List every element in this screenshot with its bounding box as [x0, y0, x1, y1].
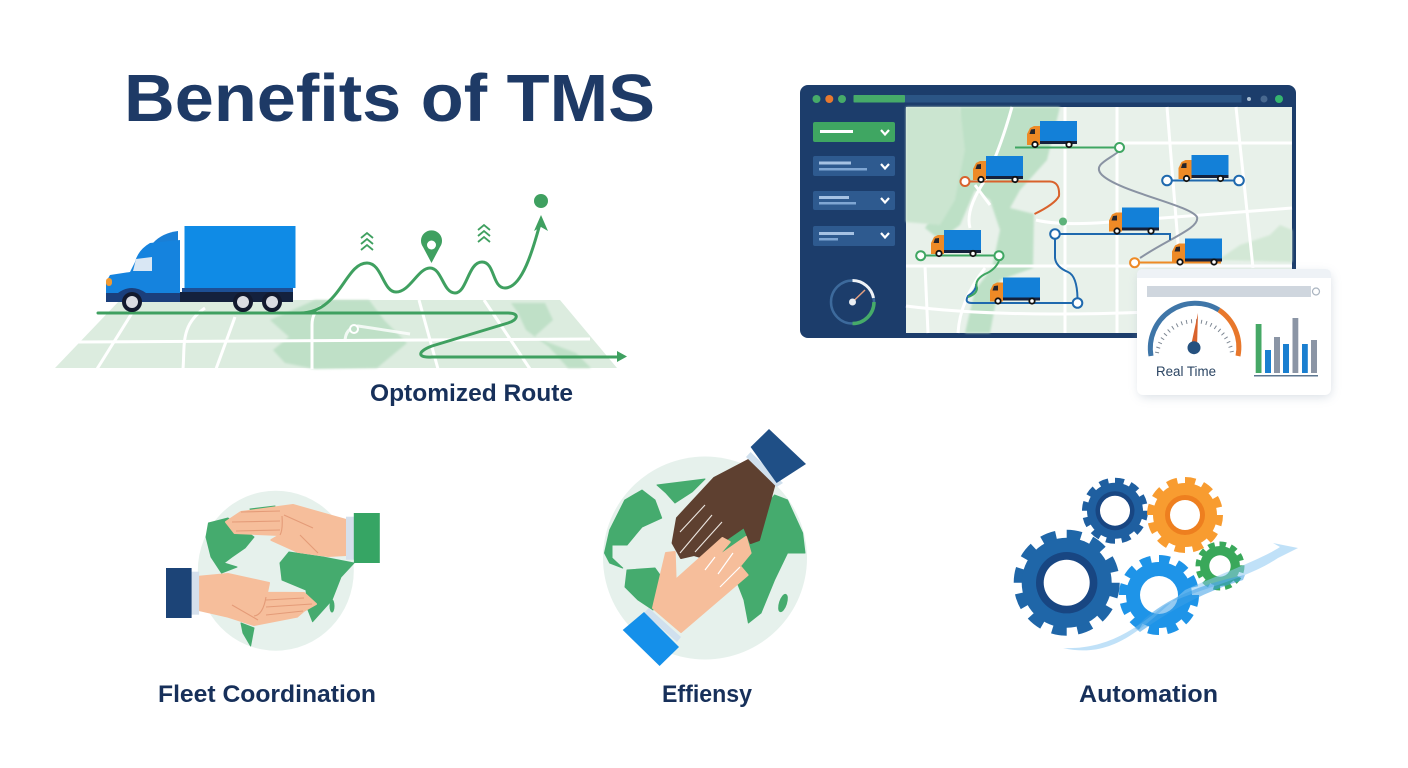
map base [55, 300, 617, 369]
panel: automation [1018, 480, 1298, 708]
lower hand [166, 568, 316, 625]
dark hand [673, 429, 806, 558]
address bar [854, 95, 1283, 103]
gear: large blue [1018, 534, 1115, 631]
gear: green [1198, 544, 1242, 588]
sidebar gauge [831, 280, 874, 324]
card top bar [1137, 269, 1331, 278]
card shadow [1139, 273, 1331, 397]
icon: chevrons right [478, 225, 490, 242]
label: Effiensy: Effiensy [662, 681, 753, 708]
title: Benefits of TMS [124, 61, 655, 136]
panel: fleet coordination [158, 491, 380, 708]
card body [1137, 269, 1331, 395]
globe [198, 491, 354, 651]
window dots [812, 95, 846, 103]
card search bar [1147, 286, 1320, 297]
panel: dashboard window [800, 85, 1296, 338]
icon: chevrons left [361, 233, 373, 250]
panel: optimized route illustration [55, 194, 627, 407]
icon: blue truck [106, 226, 296, 312]
live map [906, 107, 1292, 333]
label: Fleet Coordination: Fleet Coordination [158, 681, 376, 708]
arrowhead up [534, 215, 548, 231]
label: Real Time: Real Time [1156, 364, 1216, 379]
truck 7 [990, 278, 1040, 305]
globe [603, 456, 807, 660]
route nodes [916, 143, 1244, 308]
label: Optomized Route: Optomized Route [370, 380, 573, 407]
truck 4 [1109, 208, 1159, 235]
fleet routes [926, 148, 1234, 303]
globe land [604, 479, 805, 623]
gear: medium navy [1085, 481, 1145, 541]
bar chart [1254, 318, 1318, 376]
window frame [800, 85, 1296, 338]
truck 5 [931, 230, 981, 257]
swoosh arrow [1063, 543, 1298, 650]
icon: map pin [421, 230, 442, 263]
truck 6 [1172, 238, 1222, 266]
arrowhead right [617, 351, 627, 362]
sidebar menu [813, 122, 895, 246]
truck 3 [1178, 155, 1228, 182]
optimized route line [98, 220, 620, 357]
destination dot [534, 194, 548, 208]
gear: light blue [1123, 559, 1195, 631]
truck 1 [1027, 121, 1077, 148]
globe land [206, 506, 354, 646]
speed gauge [1150, 303, 1239, 356]
label: Automation: Automation [1079, 681, 1218, 708]
panel: real time card [1137, 269, 1331, 397]
panel: efficiency [603, 429, 807, 708]
light hand [623, 537, 751, 666]
gear: orange [1150, 480, 1220, 550]
upper hand [226, 505, 380, 563]
truck 2 [973, 156, 1023, 183]
